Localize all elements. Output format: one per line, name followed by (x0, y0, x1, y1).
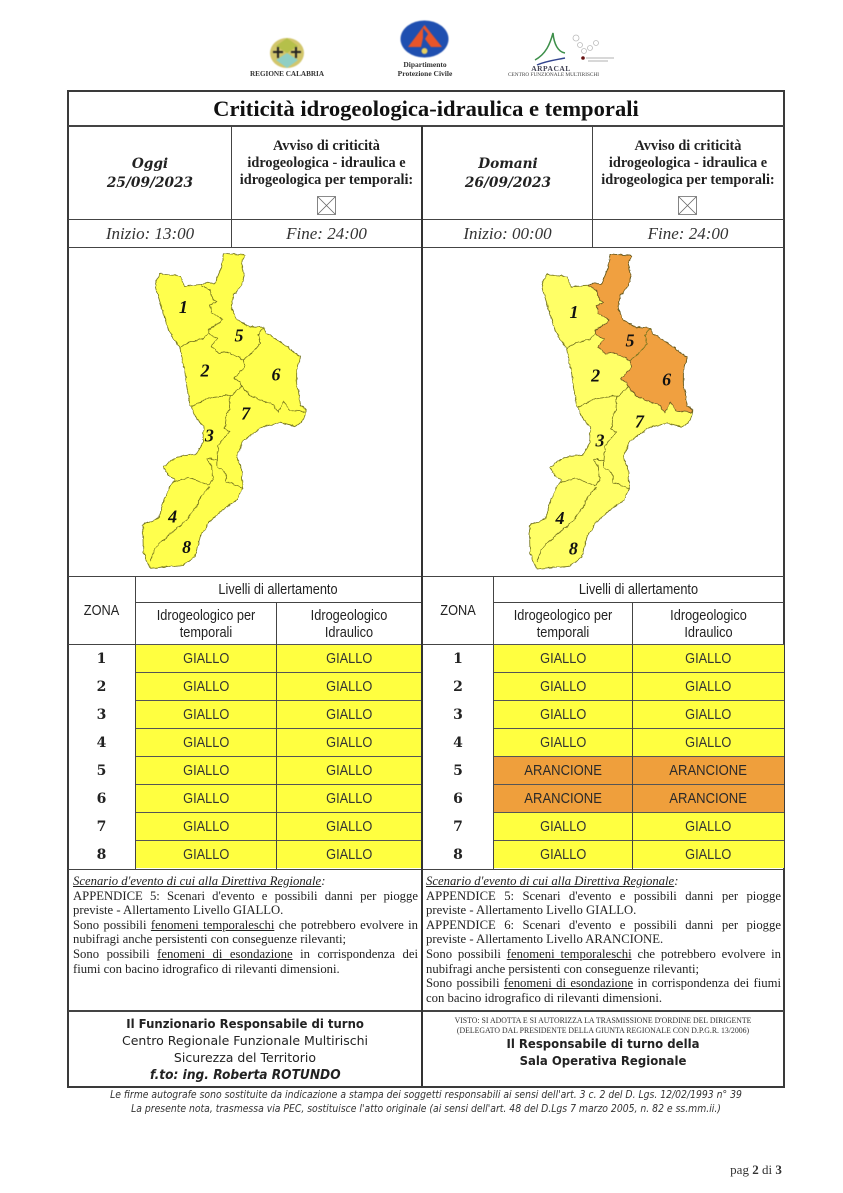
zone 6 row: 6 (97, 791, 106, 807)
zone 3 row (97, 700, 421, 728)
logo: Regione Calabria (250, 37, 324, 78)
checkbox: tomorrow (678, 196, 697, 215)
zone 2 row: GIALLO (183, 679, 229, 695)
map: tomorrow, zones 5 and 6 orange: 6 (662, 370, 671, 390)
map: today, all zones yellow: 5 (234, 325, 244, 345)
zone 7 row: GIALLO (540, 819, 586, 835)
zone 6 row: GIALLO (183, 791, 229, 807)
zone 5 row: ARANCIONE (524, 763, 602, 779)
zone 6 row: GIALLO (326, 791, 372, 807)
zone 2 row: GIALLO (326, 679, 372, 695)
header: hydraulic column: Idraulico (684, 624, 733, 640)
notice: tomorrow: idrogeologica per temporali: (601, 172, 775, 188)
zone 3 row: GIALLO (183, 707, 229, 723)
zone 3 row: 3 (453, 707, 463, 723)
zone 1 row: 1 (453, 651, 463, 667)
signature: duty officer: Il Funzionario Responsabile di turno (126, 1016, 364, 1031)
scenario text: today: Sono possibili fenomeni di esondazione in corrispondenza dei (73, 947, 418, 961)
scenario text: today: Scenario d'evento di cui alla Direttiva Regionale: (73, 874, 325, 888)
zone 4 row: GIALLO (326, 735, 372, 751)
zone 7 row (453, 812, 784, 840)
checkbox: today (317, 196, 336, 215)
zone 7 row: GIALLO (326, 819, 372, 835)
zone 5 row: GIALLO (326, 763, 372, 779)
title: Criticità idrogeologica-idraulica e temporali (213, 96, 639, 121)
main frame lines (67, 90, 785, 1088)
zone 3 row: GIALLO (326, 707, 372, 723)
signature: operations room: (DELEGATO DAL PRESIDENTE DELLA GIUNTA REGIONALE CON D.P.G.R. 13/2006) (457, 1026, 749, 1035)
map: tomorrow, zones 5 and 6 orange: 8 (569, 539, 578, 559)
map: today, all zones yellow: 8 (182, 537, 191, 557)
scenario text: today: fiumi con bacino idrografico di rilevanti dimensioni. (73, 962, 340, 976)
zone 8 row: 8 (97, 847, 106, 863)
map: today, all zones yellow: 6 (272, 365, 280, 385)
zone 7 row: GIALLO (685, 819, 732, 835)
zone 6 row (97, 784, 421, 812)
map: tomorrow, zones 5 and 6 orange: 4 (554, 508, 564, 528)
zone 8 row: GIALLO (183, 847, 229, 863)
zone 8 row: GIALLO (685, 847, 732, 863)
header: thunderstorm column: Idrogeologico per (514, 608, 612, 624)
zone 8 row (453, 840, 784, 868)
zone 4 row (97, 728, 421, 756)
footer note (110, 1090, 742, 1114)
zone 4 row: 4 (97, 735, 106, 751)
zone 1 row: 1 (97, 651, 106, 667)
map: tomorrow, zones 5 and 6 orange: 1 (570, 302, 578, 322)
date: tomorrow: Domani (478, 156, 538, 172)
signature: duty officer: f.to: ing. Roberta ROTUNDO (150, 1067, 340, 1083)
zone 3 row (453, 700, 784, 728)
signature: duty officer (122, 1016, 368, 1083)
zone 7 row: GIALLO (183, 819, 229, 835)
scenario text: today: APPENDICE 5: Scenari d'evento e possibili danni per piogge (73, 889, 418, 903)
zone 1 row: GIALLO (326, 651, 372, 667)
zone 7 row (97, 812, 421, 840)
map: tomorrow, zones 5 and 6 orange: 3 (594, 430, 604, 450)
zone 5 row: GIALLO (183, 763, 229, 779)
page number: pag 2 di 3 (730, 1162, 782, 1177)
end time: tomorrow: Fine: 24:00 (648, 224, 728, 243)
map: tomorrow, zones 5 and 6 orange (528, 254, 694, 570)
scenario text: tomorrow: Sono possibili fenomeni di esondazione in corrispondenza dei fiumi (426, 976, 781, 990)
scenario text: tomorrow (426, 874, 781, 1005)
zone 4 row: GIALLO (183, 735, 229, 751)
zone 2 row: 2 (97, 679, 106, 695)
map: today, all zones yellow (142, 253, 307, 569)
zone 3 row: GIALLO (685, 707, 732, 723)
notice: today: idrogeologica - idraulica e (247, 155, 406, 171)
signature: duty officer: Centro Regionale Funzionale Multirischi (122, 1033, 368, 1048)
scenario text: today: Sono possibili fenomeni temporaleschi che potrebbero evolvere in (73, 918, 418, 932)
zone 5 row: 5 (453, 763, 463, 779)
header: hydraulic column: Idrogeologico (670, 608, 747, 624)
logo: ARPACAL Centro Funzionale Multirischi: CENTRO FUNZIONALE MULTIRISCHI (508, 72, 599, 78)
signature: operations room: Sala Operativa Regionale (520, 1053, 686, 1068)
end time: today: Fine: 24:00 (286, 224, 367, 243)
zone 1 row (97, 644, 421, 672)
zone 7 row: 7 (97, 819, 106, 835)
signature: duty officer: Sicurezza del Territorio (174, 1050, 316, 1065)
header: hydraulic column: Idraulico (325, 624, 373, 640)
zone 2 row (97, 672, 421, 700)
signature: operations room: VISTO: SI ADOTTA E SI AUTORIZZA LA TRASMISSIONE D'ORDINE DEL DIRIGENTE (455, 1016, 751, 1025)
map: today, all zones yellow: 7 (241, 404, 251, 424)
zone 2 row: 2 (453, 679, 463, 695)
logo: ARPACAL Centro Funzionale Multirischi (508, 32, 614, 78)
zone 1 row: GIALLO (685, 651, 732, 667)
scenario text: tomorrow: previste - Allertamento Livello GIALLO. (426, 903, 636, 917)
start time: tomorrow: Inizio: 00:00 (463, 224, 552, 243)
scenario text: tomorrow: nubifragi anche persistenti con conseguenze rilevanti; (426, 962, 699, 976)
map: tomorrow, zones 5 and 6 orange: 5 (626, 330, 634, 350)
scenario text: tomorrow: APPENDICE 6: Scenari d'evento e possibili danni per piogge (426, 918, 781, 932)
scenario text: tomorrow: previste - Allertamento Livello ARANCIONE. (426, 932, 663, 946)
zone 5 row: 5 (97, 763, 106, 779)
logo: Dipartimento Protezione Civile (398, 20, 452, 78)
footer note: La presente nota, trasmessa via PEC, sostituisce l'atto originale (ai sensi dell'art. 48 del D.Lgs 7 marzo 2005, n. 82 e ss.mm.ii.) (131, 1104, 721, 1114)
zone 3 row: GIALLO (540, 707, 586, 723)
header: hydraulic column (670, 608, 747, 640)
scenario text: today (73, 874, 418, 976)
zone 1 row (453, 644, 784, 672)
date: today: Oggi (132, 156, 168, 172)
notice: today (240, 138, 413, 215)
header: thunderstorm column: Idrogeologico per (157, 608, 255, 624)
zone 2 row (453, 672, 784, 700)
header: ZONA: ZONA (440, 603, 476, 619)
zone 4 row (453, 728, 784, 756)
header: ZONA: ZONA (84, 603, 119, 619)
zone 5 row (453, 756, 784, 784)
zone 4 row: GIALLO (540, 735, 586, 751)
header: thunderstorm column: temporali (537, 624, 589, 640)
start time: today: Inizio: 13:00 (106, 224, 194, 243)
zone 1 row: GIALLO (183, 651, 229, 667)
zone 8 row (97, 840, 421, 868)
map: tomorrow, zones 5 and 6 orange: 7 (635, 411, 645, 431)
date: today (106, 156, 193, 191)
zone 8 row: GIALLO (540, 847, 586, 863)
zone 8 row: GIALLO (326, 847, 372, 863)
logo: Dipartimento Protezione Civile: Dipartimento (403, 60, 447, 69)
notice: today: idrogeologica per temporali: (240, 172, 413, 188)
header: hydraulic column: Idrogeologico (311, 608, 387, 624)
table: alert levels tomorrow (423, 577, 784, 869)
date: today: 25/09/2023 (107, 175, 193, 191)
scenario text: today: nubifragi anche persistenti con conseguenze rilevanti; (73, 932, 346, 946)
notice: tomorrow: idrogeologica - idraulica e (609, 155, 767, 171)
signature: operations room: Il Responsabile di turno della (507, 1036, 699, 1051)
notice: today: Avviso di criticità (273, 138, 380, 154)
logo: Regione Calabria: REGIONE CALABRIA (250, 70, 324, 78)
header: alert levels: Livelli di allertamento (218, 582, 338, 598)
scenario text: tomorrow: Sono possibili fenomeni temporaleschi che potrebbero evolvere in (426, 947, 781, 961)
logo: ARPACAL Centro Funzionale Multirischi: ARPACAL (531, 64, 571, 73)
zone 2 row: GIALLO (540, 679, 586, 695)
zone 8 row: 8 (453, 847, 463, 863)
footer note: Le firme autografe sono sostituite da indicazione a stampa dei soggetti responsabili ai sensi dell'art. 3 c. 2 del D. Lgs. 12/02/1993 n° 39 (110, 1090, 742, 1101)
scenario text: tomorrow: APPENDICE 5: Scenari d'evento e possibili danni per piogge (426, 889, 781, 903)
logo: Dipartimento Protezione Civile: Protezione Civile (398, 68, 452, 78)
date: tomorrow: 26/09/2023 (465, 175, 551, 191)
zone 7 row: 7 (453, 819, 463, 835)
map: today, all zones yellow: 3 (204, 426, 214, 446)
zone 5 row (97, 756, 421, 784)
zone 6 row: ARANCIONE (670, 791, 747, 807)
zone 3 row: 3 (97, 707, 106, 723)
header: alert levels: Livelli di allertamento (579, 582, 698, 598)
map: today, all zones yellow: 1 (179, 297, 188, 317)
zone 5 row: ARANCIONE (670, 763, 747, 779)
zone 6 row: ARANCIONE (524, 791, 602, 807)
header: thunderstorm column (157, 608, 256, 640)
map: today, all zones yellow: 2 (200, 360, 210, 380)
header: thunderstorm column (514, 608, 612, 640)
scenario text: today: previste - Allertamento Livello GIALLO. (73, 903, 283, 917)
scenario text: tomorrow: con bacino idrografico di rilevanti dimensioni. (426, 991, 662, 1005)
zone 4 row: GIALLO (685, 735, 732, 751)
scenario text: tomorrow: Scenario d'evento di cui alla Direttiva Regionale: (426, 874, 678, 888)
header: hydraulic column (311, 608, 387, 640)
map: tomorrow, zones 5 and 6 orange: 2 (590, 365, 600, 385)
map: today, all zones yellow: 4 (167, 506, 177, 526)
zone 4 row: 4 (453, 735, 463, 751)
zone 1 row: GIALLO (540, 651, 586, 667)
date: tomorrow (464, 156, 551, 191)
zone 6 row (453, 784, 784, 812)
header: thunderstorm column: temporali (180, 624, 232, 640)
notice: tomorrow: Avviso di criticità (635, 138, 741, 154)
signature: operations room (454, 1016, 751, 1068)
zone 2 row: GIALLO (685, 679, 732, 695)
notice: tomorrow (601, 138, 775, 215)
table: alert levels today (68, 577, 421, 869)
zone 6 row: 6 (453, 791, 463, 807)
